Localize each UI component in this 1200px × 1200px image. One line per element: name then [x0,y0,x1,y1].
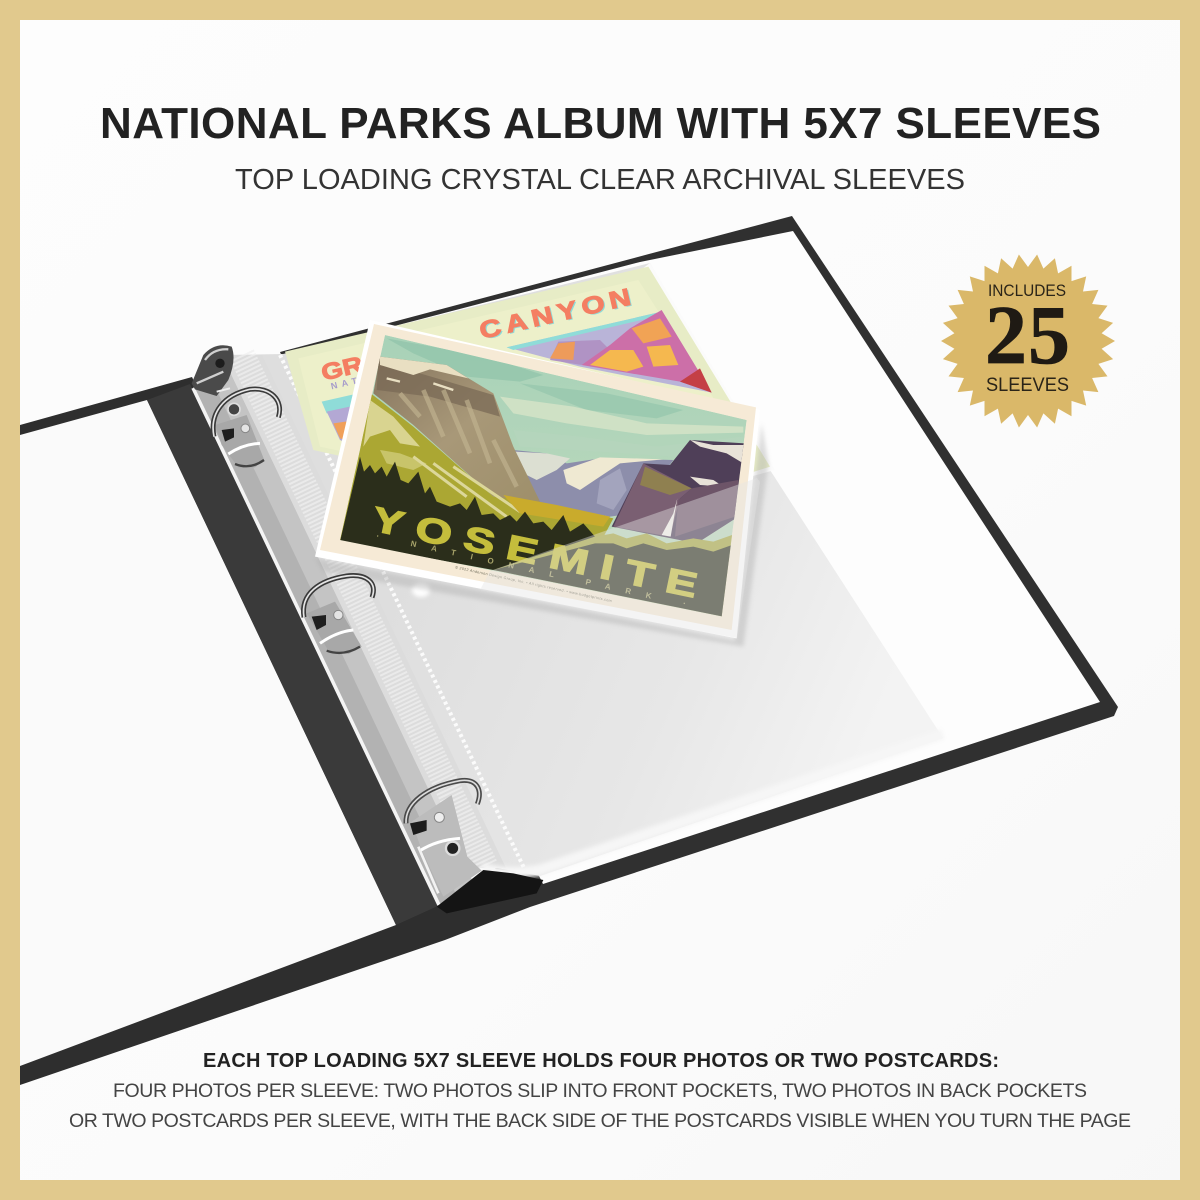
postcard title: CANYON: CANYON [477,283,638,345]
postcard title shadow: CANYON [479,284,640,346]
left cover white page [20,400,396,1066]
subtitle: TOP LOADING CRYSTAL CLEAR ARCHIVAL SLEEVES [235,164,965,196]
right peak [612,440,745,543]
left cover [20,377,530,1085]
caption line 1: FOUR PHOTOS PER SLEEVE: TWO PHOTOS SLIP INTO FRONT POCKETS, TWO PHOTOS IN BACK POCKETS [113,1080,1087,1102]
poster art [340,335,747,617]
ring 3 and base [406,780,543,913]
badge text: sleeves: SLEEVES [986,374,1069,396]
starburst [941,254,1115,428]
poster subtitle: NATIONAL PARK: · NATIONAL PARK · [376,531,687,608]
far mountains [513,450,673,517]
ring 2 and plate [303,576,373,654]
poster title: YOSEMITE: YOSEMITE [369,501,713,608]
postcard: Yosemite [315,320,760,638]
album: open binder photo [20,216,1118,1085]
caption heading: EACH TOP LOADING 5X7 SLEEVE HOLDS FOUR PHOTOS OR TWO POSTCARDS: [203,1050,999,1072]
postcard title: GR: GR [319,351,365,386]
postcards drawn in crop coordinates [285,267,770,647]
green hillside [340,393,613,543]
forest [340,457,595,570]
card shadow [315,423,768,647]
title: NATIONAL PARKS ALBUM WITH 5X7 SLEEVES [100,99,1101,148]
caption line 2: OR TWO POSTCARDS PER SLEEVE, WITH THE BACK SIDE OF THE POSTCARDS VISIBLE WHEN YOU TURN THE PAGE [69,1110,1131,1132]
sleeve [222,263,943,876]
ring 1 and plate [192,345,280,467]
ring tab [192,345,234,396]
cliff [373,357,542,505]
right cover [280,216,1118,907]
badge text: includes: INCLUDES [988,282,1066,300]
badge number: 25 [985,289,1070,382]
badge: includes 25 sleeves [941,254,1115,428]
binder metal strip [193,360,472,905]
postcard subtitle: NAT: NAT [330,375,359,391]
right cover white page [283,231,1100,884]
spine shading [147,384,440,925]
sleeve front pocket overlay on card [480,478,760,638]
sleeve ribs [242,355,486,868]
poster copyright: © 2022 Anderson Design Group, Inc. • All rights reserved. • www.budgetprints.com [455,565,612,603]
bottom caption [69,1050,1131,1132]
postcard: Grand Canyon [285,266,770,472]
